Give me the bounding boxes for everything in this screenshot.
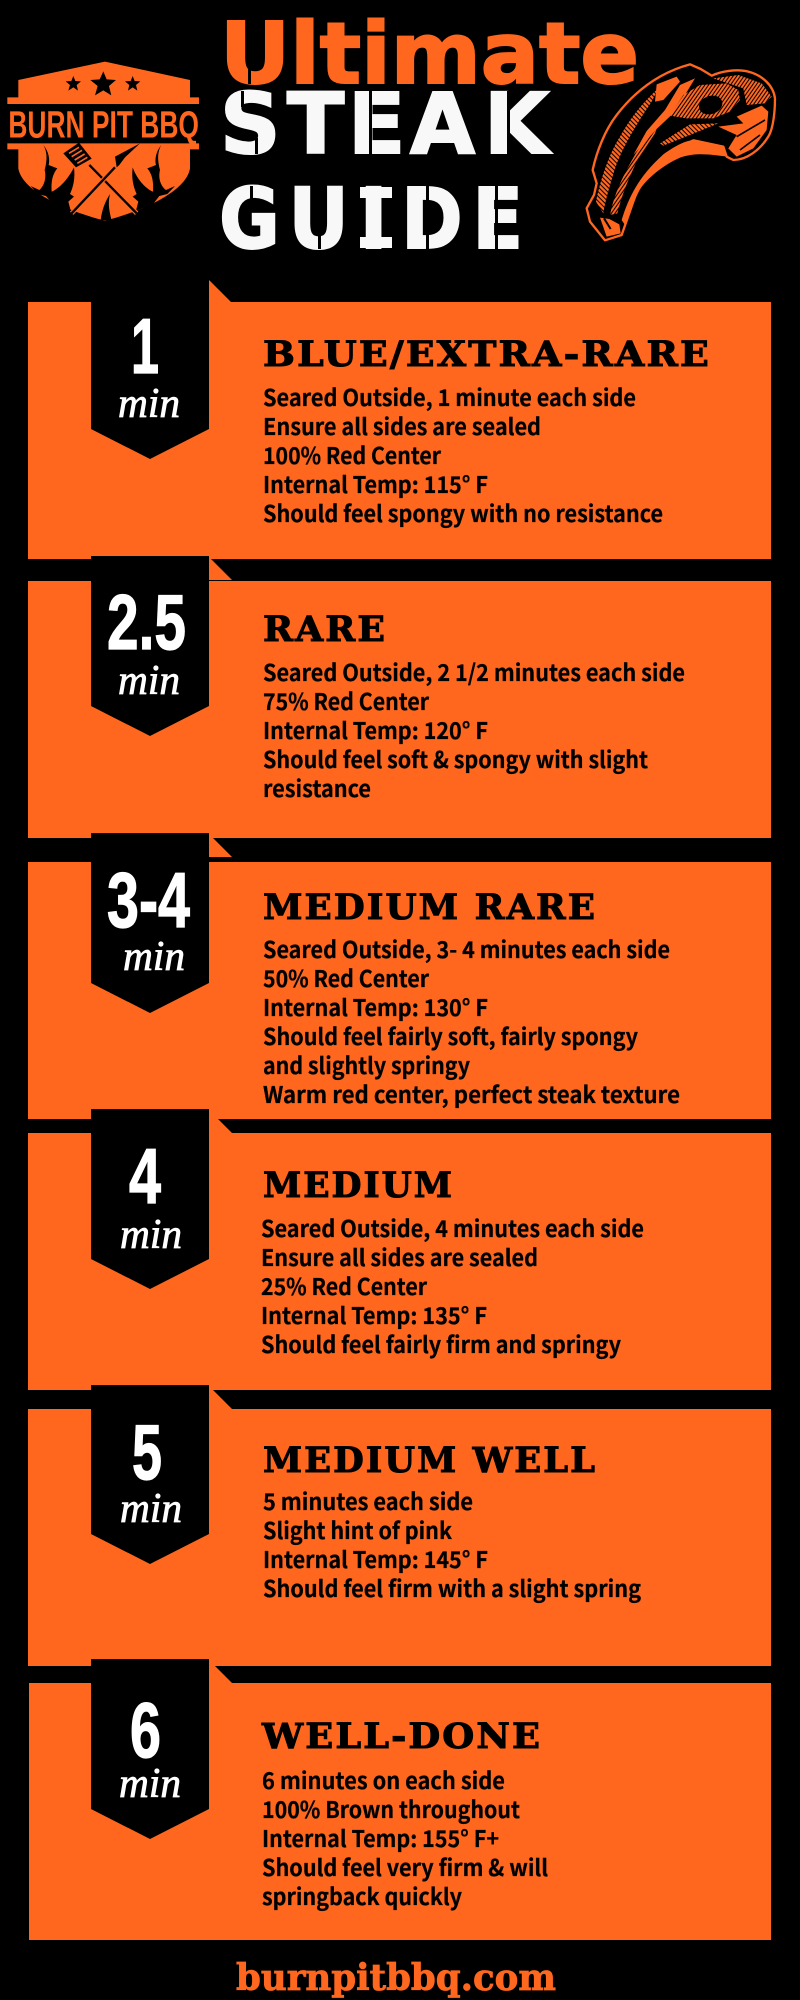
card background xyxy=(28,1409,771,1666)
description: Ensure all sides are sealed xyxy=(263,408,541,442)
card background xyxy=(28,302,771,559)
ribbon badge: 2.5 xyxy=(107,578,186,666)
ribbon badge xyxy=(91,1109,209,1289)
icon: steak illustration xyxy=(587,64,775,240)
panel: 4 min medium xyxy=(28,1109,771,1390)
fold triangle xyxy=(209,1110,232,1133)
description xyxy=(263,379,663,529)
ribbon badge: 6 xyxy=(130,1686,161,1774)
ribbon badge xyxy=(91,279,209,459)
ribbon badge xyxy=(91,556,209,736)
description xyxy=(262,1762,548,1912)
description: Warm red center, perfect steak texture xyxy=(263,1076,680,1110)
title line: Ultimate: Ultimate xyxy=(220,5,639,104)
logo stars xyxy=(66,71,140,95)
ribbon badge xyxy=(91,1385,209,1564)
description: 50% Red Center xyxy=(263,960,430,994)
description: Should feel fairly soft, fairly spongy xyxy=(263,1018,638,1052)
description: 6 minutes on each side xyxy=(262,1762,505,1796)
panel: 6 min well-done xyxy=(29,1659,771,1940)
steak meat lobes xyxy=(596,75,772,237)
fold triangle xyxy=(209,834,232,857)
logo shield xyxy=(7,143,199,221)
ribbon badge xyxy=(91,1659,209,1839)
panel: 3-4 min medium rare xyxy=(28,833,771,1119)
description: 25% Red Center xyxy=(261,1268,428,1302)
logo spatula and fork xyxy=(63,143,140,213)
panel: 2.5 min rare xyxy=(28,556,771,838)
description: Internal Temp: 115° F xyxy=(263,466,488,500)
description: Should feel fairly firm and springy xyxy=(261,1326,621,1360)
heading: MEDIUM xyxy=(263,1165,454,1206)
title line: STEAK: STEAK xyxy=(220,75,552,173)
logo wordmark: BURN PIT BBQ xyxy=(8,104,199,146)
ribbon badge: 3-4 xyxy=(107,856,190,944)
ribbon badge: min xyxy=(118,658,180,704)
card background xyxy=(29,1683,771,1940)
description xyxy=(263,931,680,1110)
heading: RARE xyxy=(263,609,387,650)
fold triangle xyxy=(209,1386,232,1409)
description: Ensure all sides are sealed xyxy=(261,1239,538,1273)
description: Seared Outside, 4 minutes each side xyxy=(261,1210,644,1244)
description: Internal Temp: 155° F+ xyxy=(262,1820,499,1854)
card background xyxy=(28,862,771,1119)
panel: 5 min medium well xyxy=(28,1385,771,1666)
ribbon badge: min xyxy=(118,381,180,427)
description: Should feel firm with a slight spring xyxy=(263,1570,641,1604)
card background xyxy=(28,581,771,838)
description: Internal Temp: 130° F xyxy=(263,989,488,1023)
description xyxy=(261,1210,644,1360)
steak outline xyxy=(587,64,775,240)
steak lower band xyxy=(622,140,727,225)
description: Slight hint of pink xyxy=(263,1512,452,1546)
ribbon badge: min xyxy=(123,934,185,980)
description: Internal Temp: 135° F xyxy=(261,1297,487,1331)
title line: GUIDE: GUIDE xyxy=(219,170,523,268)
description: Seared Outside, 3- 4 minutes each side xyxy=(263,931,670,965)
heading: BLUE/EXTRA-RARE xyxy=(263,334,711,375)
description: Should feel soft & spongy with slight xyxy=(263,741,648,775)
panel: 1 min blue/extra-rare xyxy=(28,279,771,559)
description: 100% Red Center xyxy=(263,437,442,471)
ribbon badge: 5 xyxy=(132,1408,162,1496)
description: Should feel very firm & will xyxy=(262,1849,548,1883)
logo flames xyxy=(31,145,175,221)
fold triangle xyxy=(209,1660,232,1683)
description: Seared Outside, 2 1/2 minutes each side xyxy=(263,654,685,688)
card background xyxy=(28,1133,771,1390)
heading: MEDIUM WELL xyxy=(263,1440,597,1481)
description: and slightly springy xyxy=(263,1047,470,1081)
title: Ultimate Steak Guide xyxy=(219,5,639,268)
description: 100% Brown throughout xyxy=(262,1791,520,1825)
heading: WELL-DONE xyxy=(261,1716,542,1757)
footer: website url: burnpitbbq.com xyxy=(236,1957,556,1999)
ribbon badge: 4 xyxy=(129,1132,161,1220)
logo: Burn Pit BBQ badge xyxy=(7,62,199,221)
ribbon badge: min xyxy=(120,1212,182,1258)
fold triangle xyxy=(209,280,232,303)
ribbon badge: min xyxy=(120,1486,182,1532)
logo roof xyxy=(7,62,199,104)
description xyxy=(263,654,685,804)
description: springback quickly xyxy=(262,1878,462,1912)
description: Internal Temp: 145° F xyxy=(263,1541,488,1575)
fold triangle xyxy=(209,557,232,580)
description: 5 minutes each side xyxy=(263,1483,473,1517)
description: Internal Temp: 120° F xyxy=(263,712,488,746)
ribbon badge: min xyxy=(119,1761,181,1807)
description: Seared Outside, 1 minute each side xyxy=(263,379,636,413)
ribbon badge xyxy=(91,833,209,1013)
description xyxy=(263,1483,641,1604)
description: 75% Red Center xyxy=(263,683,430,717)
heading: MEDIUM RARE xyxy=(263,887,597,928)
description: resistance xyxy=(263,770,371,804)
ribbon badge: 1 xyxy=(131,302,159,390)
description: Should feel spongy with no resistance xyxy=(263,495,663,529)
